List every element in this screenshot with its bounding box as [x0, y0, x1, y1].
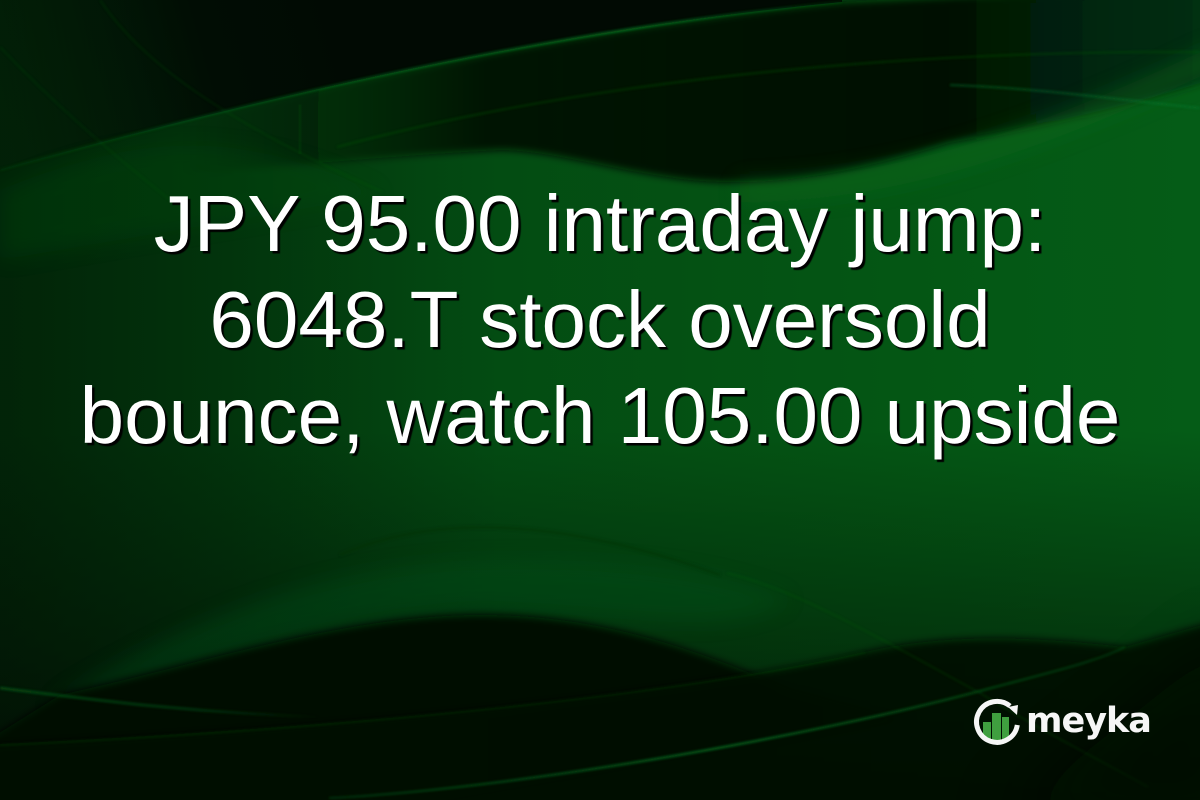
icon: circular arrow with green bars: [974, 698, 1020, 745]
title: headline text: [80, 179, 1120, 462]
title: headline text: bounce, watch 105.00 upside: [80, 371, 1120, 460]
logo: meyka: [974, 698, 1151, 745]
right-bottom vignette: [1000, 630, 1200, 800]
title: headline text: 6048.T stock oversold: [209, 275, 991, 364]
lower wave band: [40, 560, 790, 710]
bottom dark region: [0, 620, 1200, 800]
title: headline text: JPY 95.00 intraday jump:: [154, 179, 1046, 268]
mid-left lift under the top waves: [0, 146, 383, 260]
top dark regions: [0, 0, 1200, 190]
lower dark hill: [0, 615, 900, 800]
bright band under blob, right: [740, 55, 1200, 192]
logo wordmark: meyka: [1026, 701, 1151, 741]
